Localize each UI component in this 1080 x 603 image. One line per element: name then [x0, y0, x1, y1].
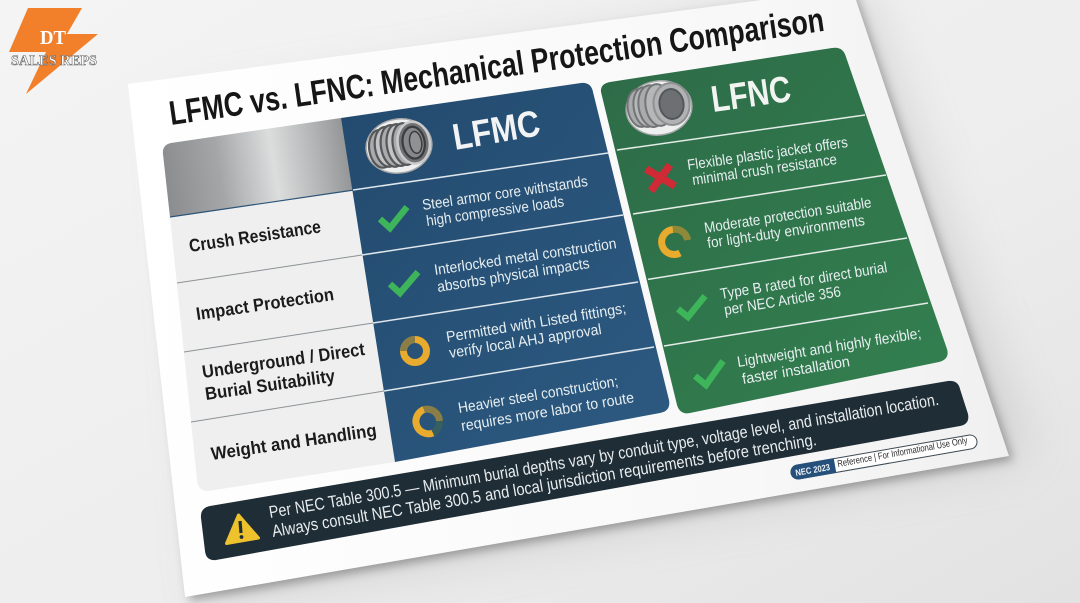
icon: check lightweight: [695, 361, 723, 385]
text: lightweight line 2: faster installation: [741, 353, 851, 388]
text: permitted line 2: verify local AHJ approval: [448, 321, 603, 362]
label: burial suitability: Burial Suitability: [204, 366, 336, 404]
brushed metal header: [163, 118, 354, 217]
logo: DT Sales Reps: [9, 8, 98, 94]
label: crush resistance: Crush Resistance: [188, 217, 322, 256]
text: steel armor line 1: Steel armor core withstands: [421, 173, 589, 214]
text: heavier line 2: requires more labor to route: [460, 389, 635, 435]
panel: LFNC column: [601, 48, 948, 413]
badge: NEC reference: [790, 435, 970, 480]
text: type B line 1: Type B rated for direct burial: [719, 259, 888, 303]
icon: check crush: [380, 207, 407, 228]
text: lightweight line 1: Lightweight and highly flexible;: [736, 325, 922, 371]
icon: warning triangle: [226, 515, 258, 544]
badge text: NEC 2023: NEC 2023: [795, 462, 831, 478]
label: weight and handling: Weight and Handling: [210, 420, 378, 464]
text: heavier line 1: Heavier steel construction;: [457, 373, 619, 417]
icon: partial ring weight: [416, 409, 440, 434]
text: flexible line 1: Flexible plastic jacket offers: [686, 134, 849, 174]
logo text: DT: DT: [40, 27, 67, 49]
icon: LFNC conduit coil: [622, 76, 696, 140]
LFMC heading: LFMC: [449, 103, 543, 158]
text: permitted line 1: Permitted with Listed fittings;: [445, 300, 627, 346]
text: steel armor line 2: high compressive loads: [425, 193, 565, 230]
label: impact protection: Impact Protection: [195, 284, 335, 324]
text: interlocked line 2: absorbs physical impacts: [436, 255, 591, 296]
icon: check impact: [390, 272, 418, 293]
icon: LFMC conduit coil: [362, 114, 436, 178]
text: flexible line 2: minimal crush resistance: [691, 151, 838, 189]
icon: check direct burial: [678, 296, 705, 317]
panel: row labels: [163, 118, 395, 491]
icon: partial ring moderate: [662, 229, 688, 254]
label: underground direct burial: Underground / Direct: [201, 339, 366, 382]
text: moderate line 2: for light-duty environments: [706, 212, 866, 252]
logo text: Sales Reps: SALES REPS: [11, 53, 97, 69]
text: note line 2: Always consult NEC Table 300.5 and local jurisdiction requirements before trenching.: [270, 430, 818, 541]
text: moderate line 1: Moderate protection suitable: [703, 194, 873, 237]
callout: burial depth note: [201, 381, 968, 560]
panel: LFMC column: [341, 83, 669, 462]
icon: red cross: [646, 165, 675, 191]
text: note line 1: Per NEC Table 300.5 — Minimum burial depths vary by conduit type, voltage level, and installation location.: [267, 390, 940, 522]
badge text: reference: Reference | For Informational Use Only: [837, 435, 969, 470]
text: type B line 2: per NEC Article 356: [723, 283, 842, 319]
text: interlocked line 1: Interlocked metal construction: [433, 235, 618, 279]
LFNC heading: LFNC: [708, 68, 793, 120]
icon: partial ring burial: [404, 340, 426, 362]
